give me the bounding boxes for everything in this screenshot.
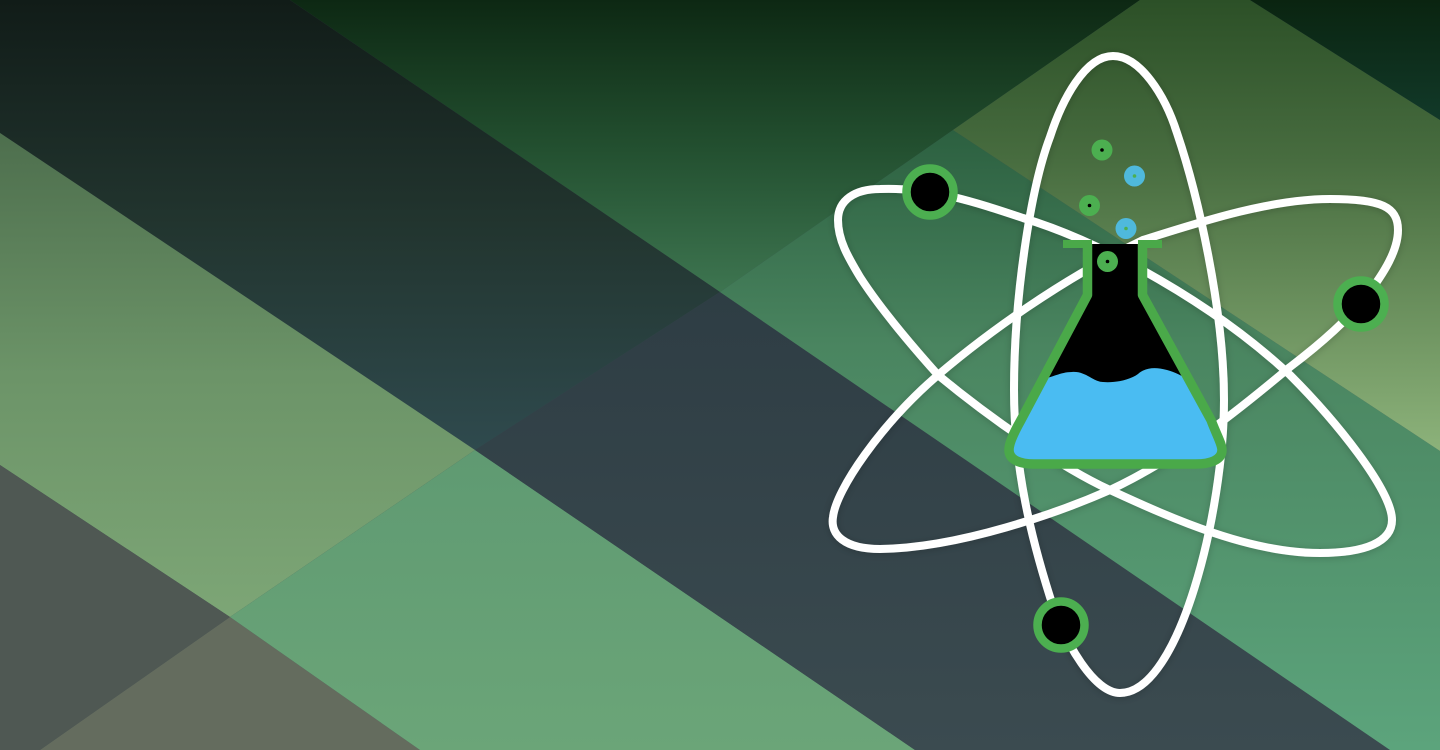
flask dark interior (1009, 244, 1222, 464)
bubble: blue lower (1116, 218, 1136, 239)
atom orbits (833, 56, 1398, 693)
bubble: blue upper (1124, 166, 1145, 186)
orbit: lower-left to upper-right (833, 199, 1398, 549)
bubble: green middle (1079, 195, 1100, 216)
flask outline (1009, 244, 1222, 464)
flask (1009, 240, 1222, 464)
orbit: upper-left to lower-right (838, 189, 1392, 553)
electron: bottom (1038, 602, 1084, 648)
flask rim: right (1138, 240, 1162, 248)
orbit: vertical (1014, 56, 1224, 693)
flask rim: left (1063, 240, 1092, 248)
bubble: green in neck (1097, 251, 1118, 272)
bubble: green top (1092, 140, 1112, 160)
electron: right (1338, 280, 1384, 328)
electron: upper left (906, 168, 954, 216)
flask liquid (1009, 368, 1222, 464)
